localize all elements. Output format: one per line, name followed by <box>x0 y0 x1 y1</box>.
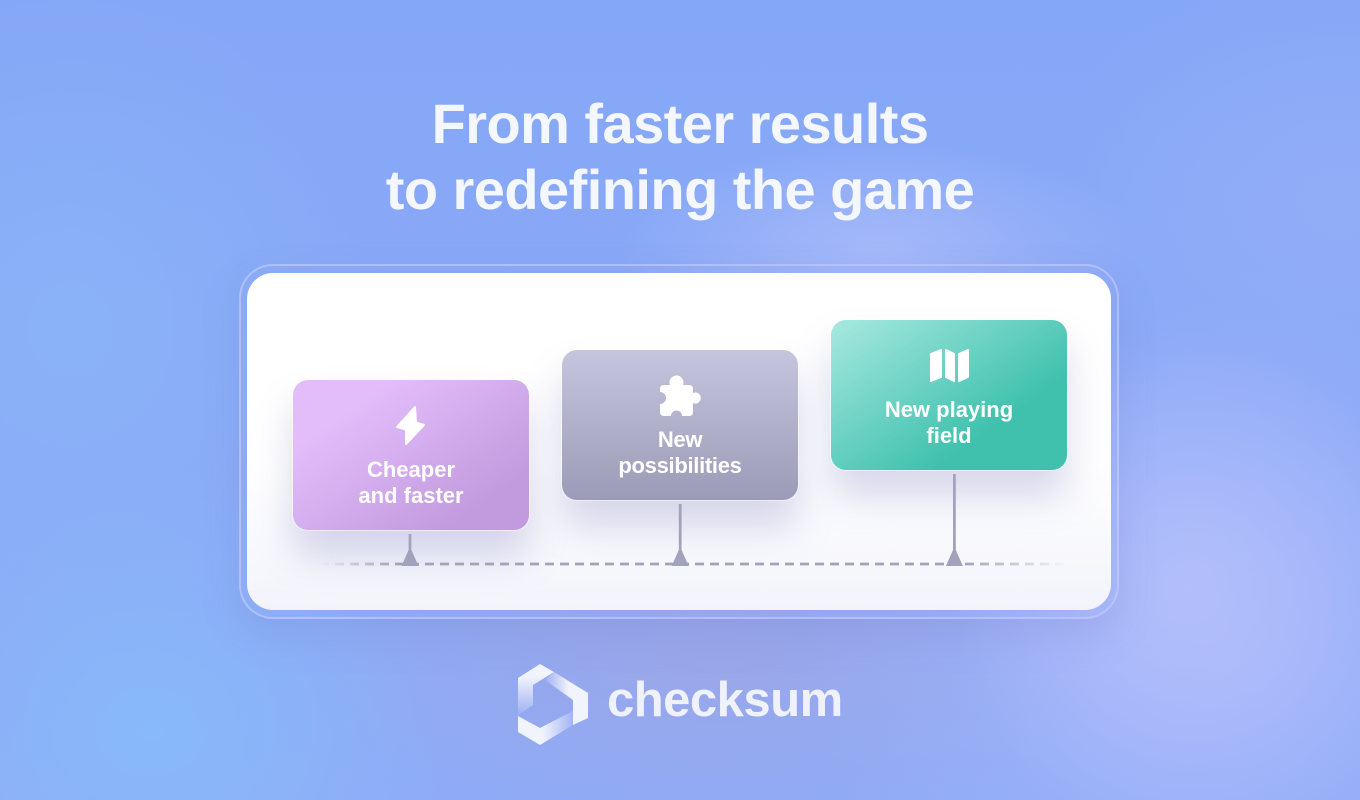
timeline axis <box>328 474 1060 566</box>
icon: puzzle piece <box>660 375 701 416</box>
logo: checksum <box>518 664 843 745</box>
panel outer ring <box>239 264 1119 619</box>
icon: hexagon mark <box>518 664 588 745</box>
label <box>885 397 1013 448</box>
title <box>386 92 974 221</box>
card shadow: possibilities <box>562 350 798 500</box>
label <box>358 457 464 508</box>
label: Cheaper <box>367 457 455 482</box>
panel: timeline card <box>247 273 1111 610</box>
label: New <box>658 427 702 452</box>
title: From faster results <box>432 92 928 155</box>
label: and faster <box>358 483 464 508</box>
card: cheaper and faster <box>293 380 529 530</box>
card shadow: playing field <box>831 320 1067 470</box>
label: field <box>926 423 972 448</box>
label: New playing <box>885 397 1013 422</box>
title: to redefining the game <box>386 158 974 221</box>
label <box>618 427 742 478</box>
icon: map <box>930 349 969 382</box>
card: new possibilities <box>562 350 798 500</box>
wordmark: checksum <box>607 673 843 727</box>
card shadow: cheaper <box>293 380 529 530</box>
icon: lightning bolt <box>396 406 425 445</box>
card: new playing field <box>831 320 1067 470</box>
label: possibilities <box>618 453 742 478</box>
